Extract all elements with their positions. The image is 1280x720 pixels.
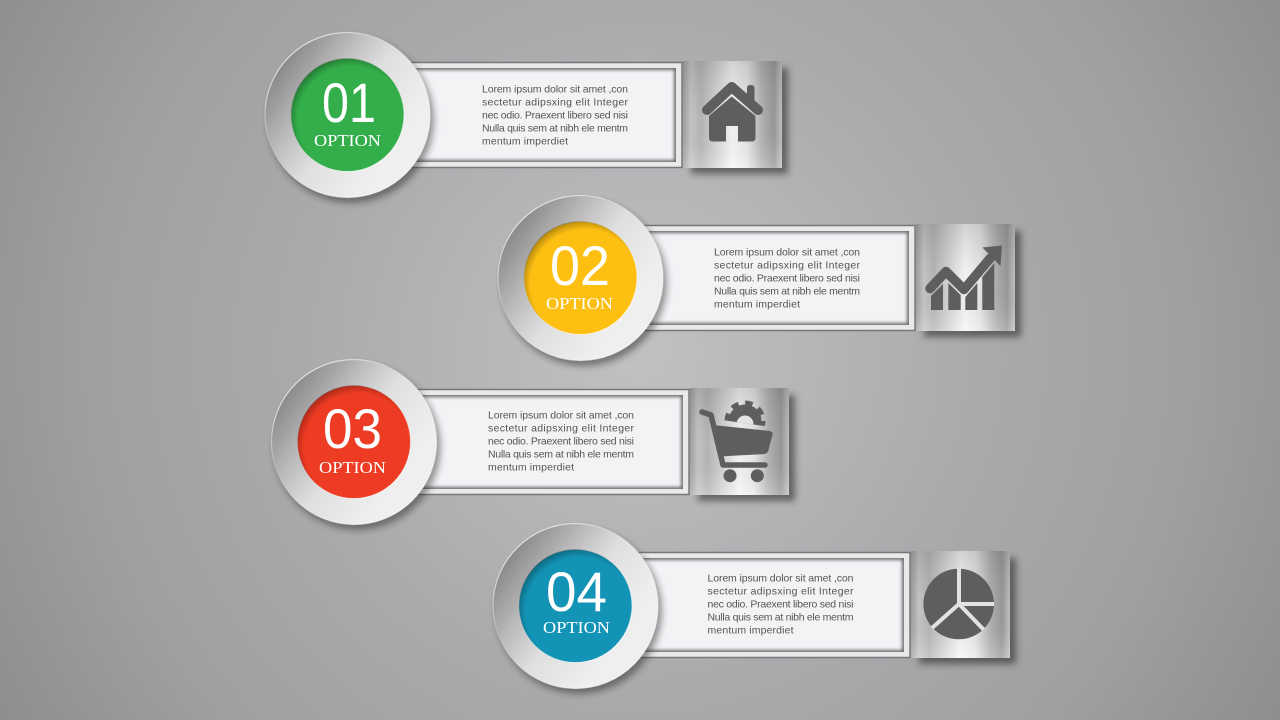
body text 04: Lorem ipsum dolor sit amet ,con (708, 572, 854, 584)
body text 03: Nulla quis sem at nibh ele mentm (488, 448, 634, 460)
body text 02 (714, 246, 860, 310)
body text 01: sectetur adipsxing elit Integer (482, 96, 628, 108)
body text 02: mentum imperdiet (714, 298, 800, 310)
body text 02: nec odio. Praexent libero sed nisi (714, 272, 860, 284)
panel: option 01 (265, 32, 788, 203)
body text 04: mentum imperdiet (708, 624, 794, 636)
body text 01: mentum imperdiet (482, 136, 568, 148)
body text 01: Lorem ipsum dolor sit amet ,con (482, 84, 628, 96)
body text 03: nec odio. Praexent libero sed nisi (488, 436, 634, 448)
body text 02: Nulla quis sem at nibh ele mentm (714, 286, 860, 298)
number badge 01: 01 (322, 71, 376, 134)
body text 03: mentum imperdiet (488, 462, 574, 474)
text band 03 (417, 390, 689, 494)
body text 02: sectetur adipsxing elit Integer (714, 260, 860, 272)
body text 02: Lorem ipsum dolor sit amet ,con (714, 246, 860, 258)
number badge 01: OPTION (314, 131, 381, 150)
body text 04: nec odio. Praexent libero sed nisi (708, 598, 854, 610)
body text 01: nec odio. Praexent libero sed nisi (482, 110, 628, 122)
number badge 02 (498, 196, 667, 366)
number badge 03: OPTION (319, 458, 386, 477)
number badge 04: 04 (546, 560, 607, 623)
panel: option 04 (493, 524, 1016, 694)
body text 04 (708, 572, 854, 636)
body text 03: Lorem ipsum dolor sit amet ,con (488, 410, 634, 422)
body text 03 (488, 410, 634, 474)
panel: option 02 (498, 196, 1021, 366)
body text 04: sectetur adipsxing elit Integer (708, 586, 854, 598)
icon tile: pie chart (911, 551, 1016, 664)
number badge 02: 02 (550, 234, 610, 297)
number badge 03: 03 (323, 397, 382, 460)
body text 04: Nulla quis sem at nibh ele mentm (708, 612, 854, 624)
number badge 02: OPTION (546, 294, 613, 313)
icon tile: shopping cart with gear (690, 388, 795, 501)
number badge 01 (265, 32, 434, 203)
number badge 04: OPTION (543, 618, 610, 637)
number badge 03 (272, 360, 440, 530)
icon tile: home (683, 61, 788, 174)
panel: option 03 (272, 360, 795, 530)
body text 01 (482, 84, 628, 148)
body text 01: Nulla quis sem at nibh ele mentm (482, 122, 628, 134)
number badge 04 (493, 524, 662, 694)
body text 03: sectetur adipsxing elit Integer (488, 422, 634, 434)
text band 01 (410, 62, 682, 168)
text band 04 (638, 552, 910, 658)
icon tile: growth chart (916, 224, 1021, 337)
text band 02 (643, 226, 915, 330)
